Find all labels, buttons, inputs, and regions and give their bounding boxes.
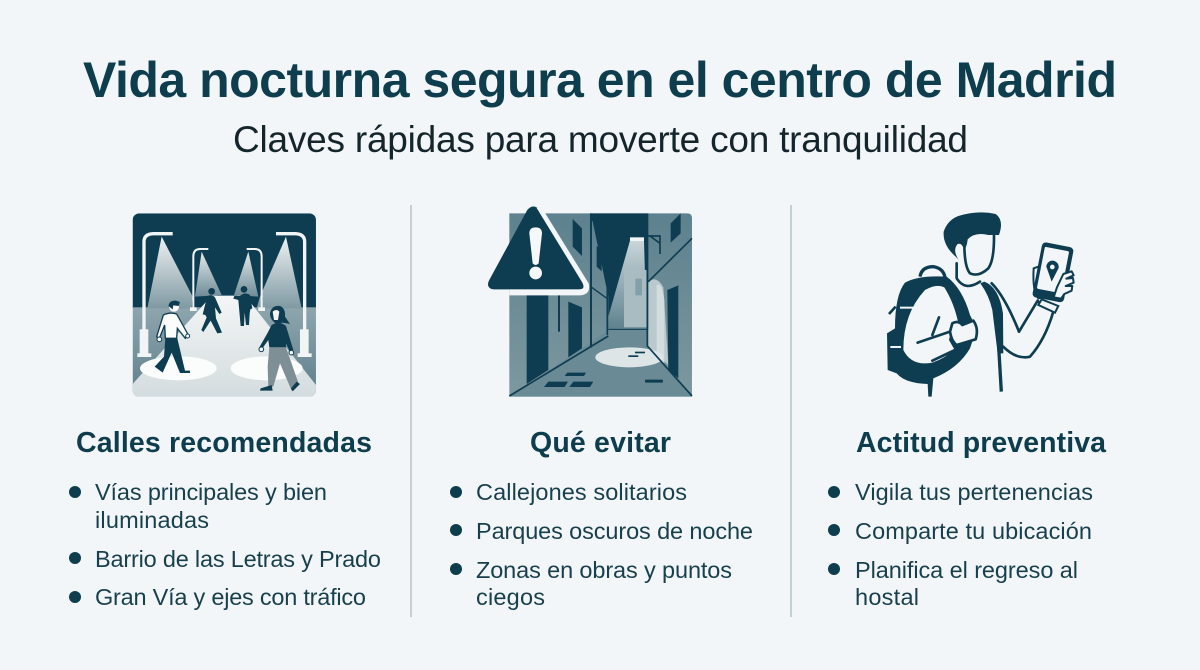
warning triangle: [491, 208, 589, 295]
list: qué evitar: [450, 479, 753, 610]
person left: [155, 301, 190, 373]
list: qué evitar: Zonas en obras y puntos: [476, 557, 732, 583]
list: actitud preventiva: Planifica el regreso al: [855, 557, 1078, 583]
list: qué evitar: Parques oscuros de noche: [476, 518, 753, 544]
list: actitud preventiva: [828, 479, 1093, 610]
list: qué evitar: Callejones solitarios: [476, 479, 687, 505]
heading: qué evitar: Qué evitar: [530, 427, 671, 459]
head: [957, 235, 1053, 357]
heading: actitud preventiva: Actitud preventiva: [856, 427, 1107, 459]
list: calles recomendadas: Vías principales y bien: [95, 479, 327, 505]
divider right: [790, 205, 792, 617]
panel: qué evitar: [450, 208, 753, 610]
list: actitud preventiva: Comparte tu ubicación: [855, 518, 1092, 544]
panel: calles recomendadas: [69, 213, 381, 610]
subtitle: Claves rápidas para moverte con tranquilidad: [233, 119, 968, 160]
panel: actitud preventiva: [828, 212, 1107, 610]
person middle right: [233, 286, 252, 326]
title: Vida nocturna segura en el centro de Madrid: [83, 52, 1117, 108]
person middle left: [201, 288, 222, 333]
icon: lit street with pedestrians: [133, 213, 316, 397]
hair: [944, 212, 1001, 259]
list: actitud preventiva: hostal: [855, 584, 919, 610]
divider left: [410, 205, 412, 617]
icon: traveller with backpack and phone: [887, 212, 1074, 397]
icon: dark alley with warning: [491, 208, 692, 397]
list: qué evitar: ciegos: [476, 584, 545, 610]
list: calles recomendadas: Barrio de las Letras y Prado: [95, 546, 381, 572]
person right: [259, 306, 300, 391]
backpack: [887, 267, 977, 397]
list: calles recomendadas: iluminadas: [95, 507, 209, 533]
list: actitud preventiva: Vigila tus pertenencias: [855, 479, 1093, 505]
phone: [1032, 242, 1074, 313]
list: calles recomendadas: [69, 479, 381, 610]
strap: [980, 282, 1003, 353]
list: calles recomendadas: Gran Vía y ejes con tráfico: [95, 584, 366, 610]
street lamps: [137, 234, 312, 357]
heading: calles recomendadas: Calles recomendadas: [76, 427, 372, 459]
arm lines: [918, 317, 977, 361]
